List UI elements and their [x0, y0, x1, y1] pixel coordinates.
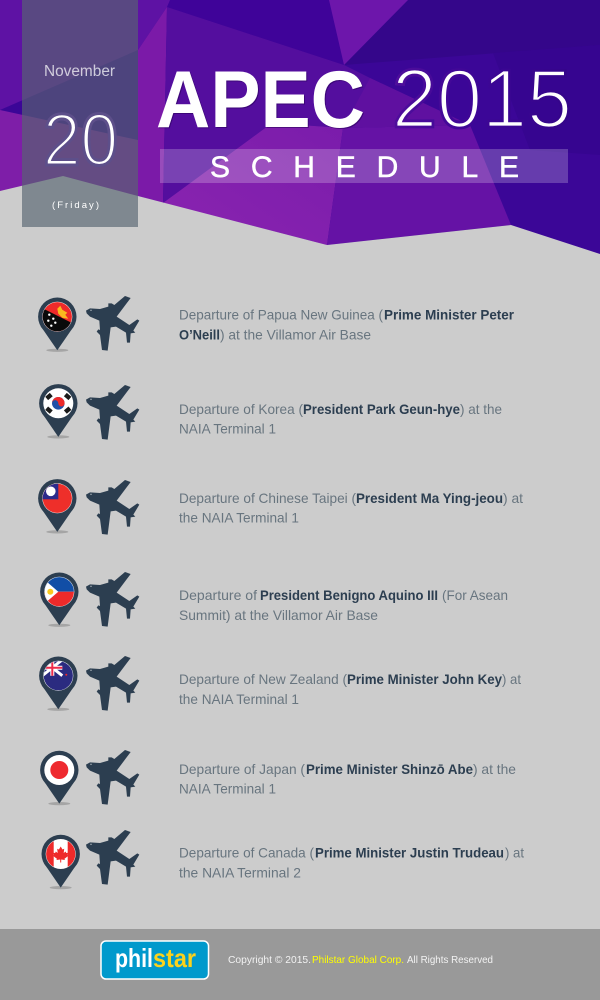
- text: ) at: [503, 490, 523, 506]
- month: November: [44, 63, 115, 80]
- text: Departure of Japan (: [179, 761, 305, 777]
- pin: Philippines flag: [40, 572, 78, 627]
- row 7: Canada: the NAIA Terminal 2: [179, 865, 301, 881]
- pin: Canada flag: [42, 835, 80, 889]
- pin: Japan flag: [40, 751, 78, 805]
- pin: New Zealand flag: [39, 656, 78, 711]
- text: ) at: [505, 845, 524, 861]
- row 4: Philippines: [40, 572, 508, 627]
- day number: 20: [43, 100, 118, 181]
- pin: Korea flag: [39, 384, 78, 438]
- icon: plane: [86, 385, 139, 440]
- row 3: Chinese Taipei: [38, 479, 523, 535]
- logo: philstar: phil: [115, 943, 153, 973]
- footer: [0, 929, 600, 1000]
- row 2: Korea: NAIA Terminal 1: [179, 420, 276, 436]
- text: Departure of Korea (: [179, 401, 303, 417]
- text: ) at the: [460, 401, 502, 417]
- text: Departure of Chinese Taipei (: [179, 490, 356, 506]
- row 4: Philippines: Summit) at the Villamor Air Base: [179, 607, 378, 623]
- text: Departure of: [179, 587, 257, 603]
- row 2: Korea: [39, 384, 502, 440]
- pin: Chinese Taipei flag: [38, 479, 76, 534]
- grey ground shape: [0, 176, 600, 300]
- text: (For Asean: [442, 587, 508, 603]
- pin: Papua New Guinea flag: [38, 298, 76, 352]
- row 6: Japan: [40, 750, 516, 805]
- icon: plane: [86, 750, 139, 805]
- row 7: Canada: [42, 830, 524, 889]
- text: Departure of Canada (: [179, 845, 314, 861]
- text: President Ma Ying-jeou: [356, 490, 503, 506]
- text: President Benigno Aquino III: [260, 587, 438, 603]
- row 1: Papua New Guinea: O’Neill: [179, 326, 220, 342]
- text: Departure of New Zealand (: [179, 671, 347, 687]
- title: 2015: [392, 52, 572, 145]
- header polygon background: [0, 0, 600, 256]
- icon: plane: [86, 830, 139, 885]
- icon: plane: [86, 296, 139, 351]
- text: Prime Minister Justin Trudeau: [315, 845, 504, 861]
- date panel: [22, 0, 138, 227]
- text: President Park Geun-hye: [303, 401, 460, 417]
- icon: plane: [86, 480, 139, 535]
- text: Prime Minister Peter: [384, 306, 515, 322]
- icon: plane: [86, 656, 139, 711]
- row 1: Papua New Guinea: ) at the Villamor Air Base: [220, 326, 371, 342]
- schedule banner: SCHEDULE: [210, 151, 519, 184]
- logo: philstar: star: [153, 943, 196, 973]
- copyright: All Rights Reserved: [407, 954, 493, 966]
- copyright: Copyright © 2015.: [228, 954, 311, 966]
- title: [156, 52, 572, 145]
- text: Prime Minister John Key: [347, 671, 502, 687]
- copyright: Philstar Global Corp.: [312, 954, 404, 966]
- text: Departure of Papua New Guinea (: [179, 306, 383, 322]
- weekday: (Friday): [52, 200, 99, 211]
- row 3: Chinese Taipei: the NAIA Terminal 1: [179, 510, 299, 526]
- icon: plane: [86, 572, 139, 627]
- title: APEC: [156, 55, 365, 145]
- row 6: Japan: NAIA Terminal 1: [179, 780, 276, 796]
- text: Prime Minister Shinzō Abe: [306, 761, 473, 777]
- logo: philstar: [101, 941, 208, 979]
- text: ) at: [502, 671, 521, 687]
- text: ) at the: [473, 761, 516, 777]
- row 5: New Zealand: [39, 656, 521, 711]
- row 5: New Zealand: the NAIA Terminal 1: [179, 691, 299, 707]
- row 1: Papua New Guinea: [38, 296, 515, 352]
